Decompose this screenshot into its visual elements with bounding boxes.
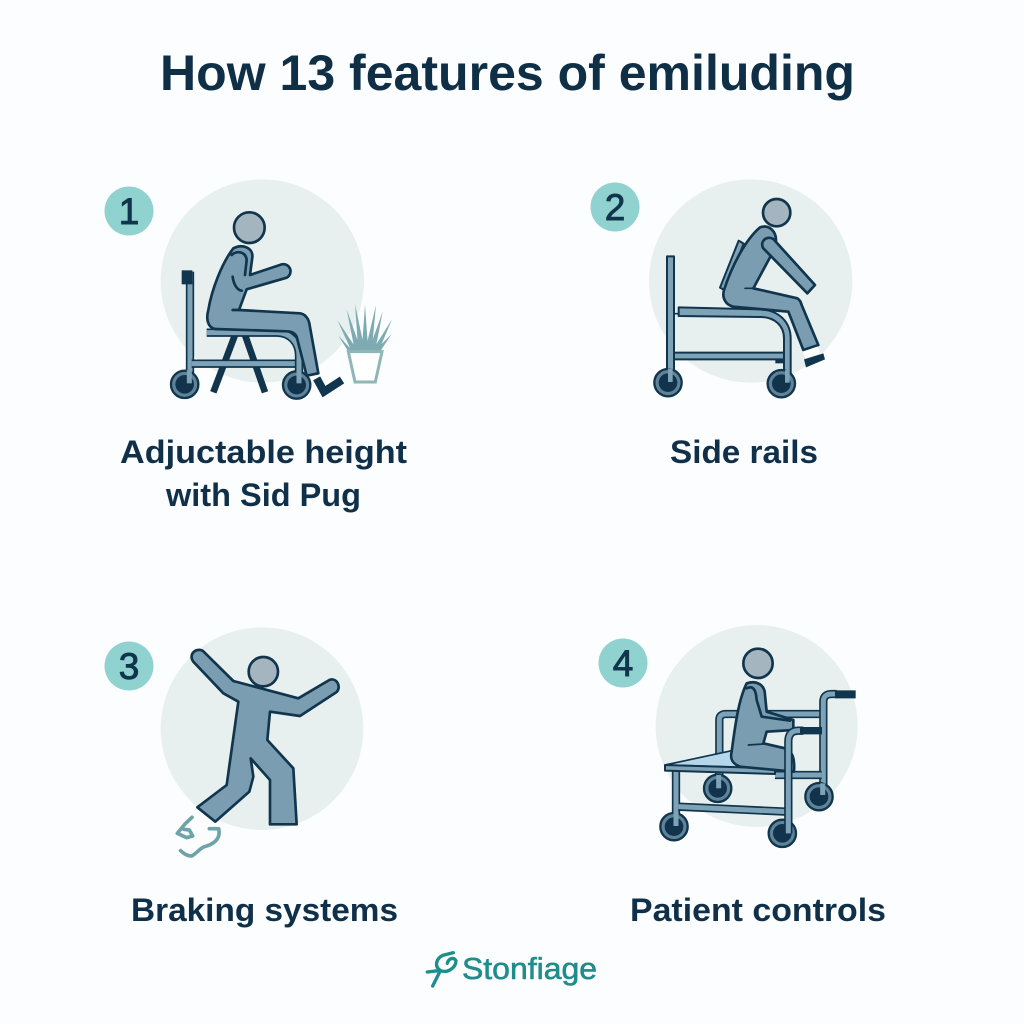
illustration: person seated on edge of wheeled bed <box>649 179 852 397</box>
badge 3 <box>104 642 154 690</box>
badge 2 <box>590 182 640 232</box>
panel 1: adjustable height <box>104 179 407 513</box>
badge 2: 2 <box>605 187 625 228</box>
badge 4 <box>598 638 648 688</box>
badge 1: 1 <box>119 191 139 232</box>
label: adjustable height: with Sid Pug <box>165 477 361 513</box>
logo wordmark: Stonfiage <box>462 951 597 986</box>
illustration: person seated in wheeled chair with handles <box>656 625 858 847</box>
panel 3: braking systems <box>104 627 398 928</box>
logo <box>427 951 597 986</box>
icon: logo mark <box>427 953 456 986</box>
label: side rails: Side rails <box>670 434 818 470</box>
badge 1 <box>104 186 154 236</box>
badge 4: 4 <box>613 643 633 684</box>
label: patient controls: Patient controls <box>630 892 886 928</box>
title: How 13 features of emiluding <box>160 45 855 101</box>
icon: brake scribble <box>177 817 219 856</box>
icon: plant <box>337 304 392 352</box>
label: adjustable height: Adjuctable height <box>120 434 407 470</box>
illustration: person stumbling with brake symbol <box>161 627 363 856</box>
panel 4: patient controls <box>598 625 886 928</box>
label: adjustable height <box>120 434 407 513</box>
illustration: seated person on wheeled chair with plant <box>161 179 392 399</box>
badge 3: 3 <box>119 646 139 687</box>
panel 2: side rails <box>590 179 852 470</box>
label: braking systems: Braking systems <box>131 892 398 928</box>
